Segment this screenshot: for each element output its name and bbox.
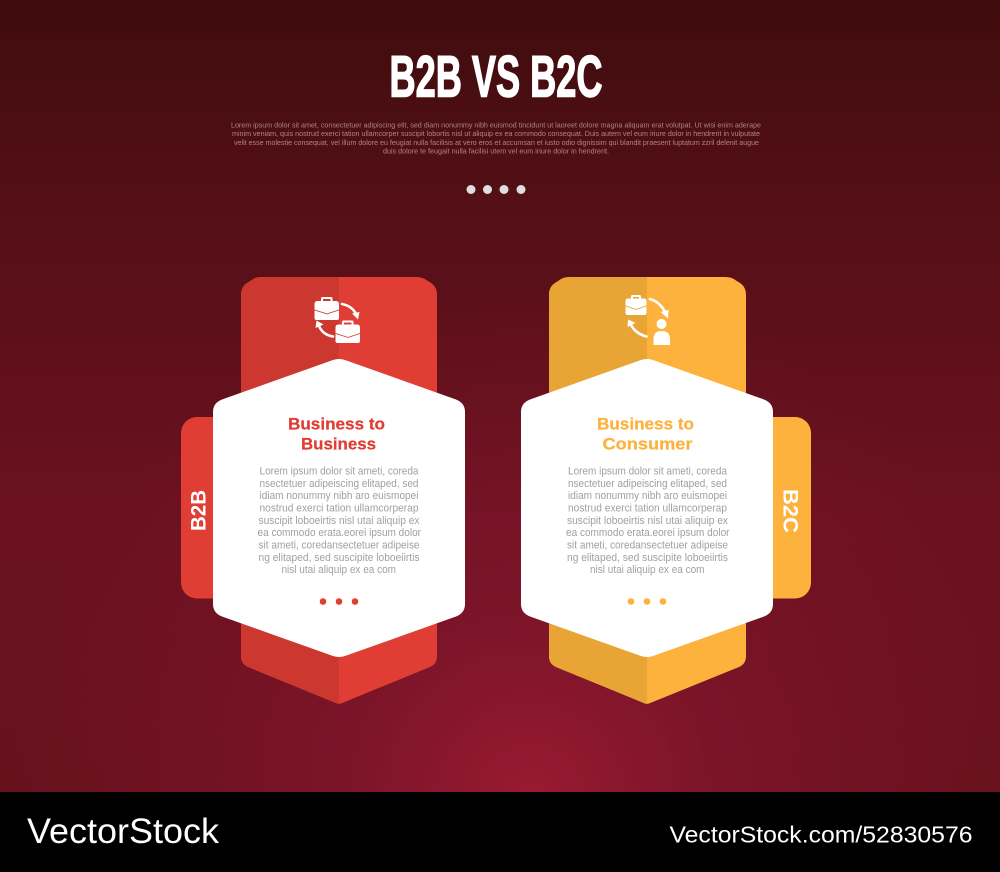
card dots: B2C	[628, 598, 666, 605]
intro paragraph: minim veniam, quis nostrud exerci tation ullamcorper suscipit lobortis nisl ut aliquip ex ea commodo consequat. Duis autem vel eum iriure dolor in hendrerit in vulputate	[232, 129, 760, 138]
body text: B2B: nsectetuer adipeiscing elitaped, sed	[260, 478, 419, 490]
heading: Business to Consumer	[597, 414, 694, 454]
body text: B2C: idiam nonummy nibh aro euismopei	[568, 490, 727, 502]
body text: B2B: ng elitaped, sed suscipite loboeiirtis	[258, 552, 420, 564]
body text: B2B	[258, 466, 421, 576]
panel: B2C	[521, 277, 811, 704]
heading: Business to Business	[288, 414, 385, 454]
intro paragraph: Lorem ipsum dolor sit amet, consectetuer adipiscing elit, sed diam nonummy nibh euismod tincidunt ut laoreet dolore magna aliquam erat volutpat. Ut wisi enim aderape	[231, 120, 761, 130]
white hexagon card: B2B	[213, 359, 465, 657]
footer bar	[0, 792, 1000, 872]
icon: business to business	[314, 297, 360, 343]
body text: B2B: nisl utai aliquip ex ea com	[282, 564, 396, 576]
body text: B2C: ng elitaped, sed suscipite loboeiirtis	[567, 552, 728, 564]
body text: B2B: sit ameti, coredansectetuer adipeise	[258, 540, 420, 552]
footer url: VectorStock.com/52830576	[670, 822, 972, 848]
back shape: B2B	[241, 277, 437, 704]
body text: B2C: nsectetuer adipeiscing elitaped, sed	[568, 478, 727, 490]
heading: Business to Business: Business	[301, 434, 376, 454]
body text: B2C: nisl utai aliquip ex ea com	[590, 564, 705, 576]
intro paragraph: velit esse molestie consequat, vel illum dolore eu feugiat nulla facilisis at vero eros et accumsan et iusto odio dignissim qui blandit praesent luptatum zzril delenit augue	[234, 138, 759, 147]
intro paragraph: duis dolore te feugait nulla facilisi utem vel eum iriure dolor in hendrerit.	[383, 146, 609, 156]
pagination dots	[466, 185, 526, 194]
body text: B2C: ea commodo erata.eorei ipsum dolor	[566, 527, 730, 539]
body text: B2C: nostrud exerci tation ullamcorperap	[568, 502, 727, 514]
icon: business to consumer	[626, 295, 670, 345]
body text: B2C: sit ameti, coredansectetuer adipeise	[567, 540, 728, 552]
heading: Business to Consumer: Business to	[597, 414, 694, 434]
footer brand: VectorStock	[27, 812, 220, 851]
body text: B2C: Lorem ipsum dolor sit ameti, coreda	[568, 466, 727, 478]
heading: Business to Consumer: Consumer	[602, 434, 693, 454]
title: B2B VS B2C	[390, 44, 602, 110]
body text: B2C	[566, 466, 730, 576]
body text: B2B: suscipit loboeirtis nisl utai aliquip ex	[258, 515, 420, 527]
body text: B2B: ea commodo erata.eorei ipsum dolor	[258, 527, 421, 539]
side tab: B2B	[181, 417, 261, 598]
white hexagon card: B2C	[521, 359, 773, 657]
heading: Business to Business: Business to	[288, 414, 385, 434]
tab label: B2C: B2C	[778, 489, 802, 533]
panel: B2B	[181, 277, 465, 704]
back shape: B2C	[549, 277, 746, 704]
card dots: B2B	[320, 598, 358, 605]
body text: B2B: Lorem ipsum dolor sit ameti, coreda	[260, 466, 419, 478]
intro paragraph	[231, 120, 761, 156]
tab label: B2B: B2B	[188, 490, 210, 531]
body text: B2C: suscipit loboeirtis nisl utai aliquip ex	[567, 515, 729, 527]
body text: B2B: idiam nonummy nibh aro euismopei	[260, 490, 418, 502]
side tab: B2C	[731, 417, 811, 598]
body text: B2B: nostrud exerci tation ullamcorperap	[260, 502, 419, 514]
